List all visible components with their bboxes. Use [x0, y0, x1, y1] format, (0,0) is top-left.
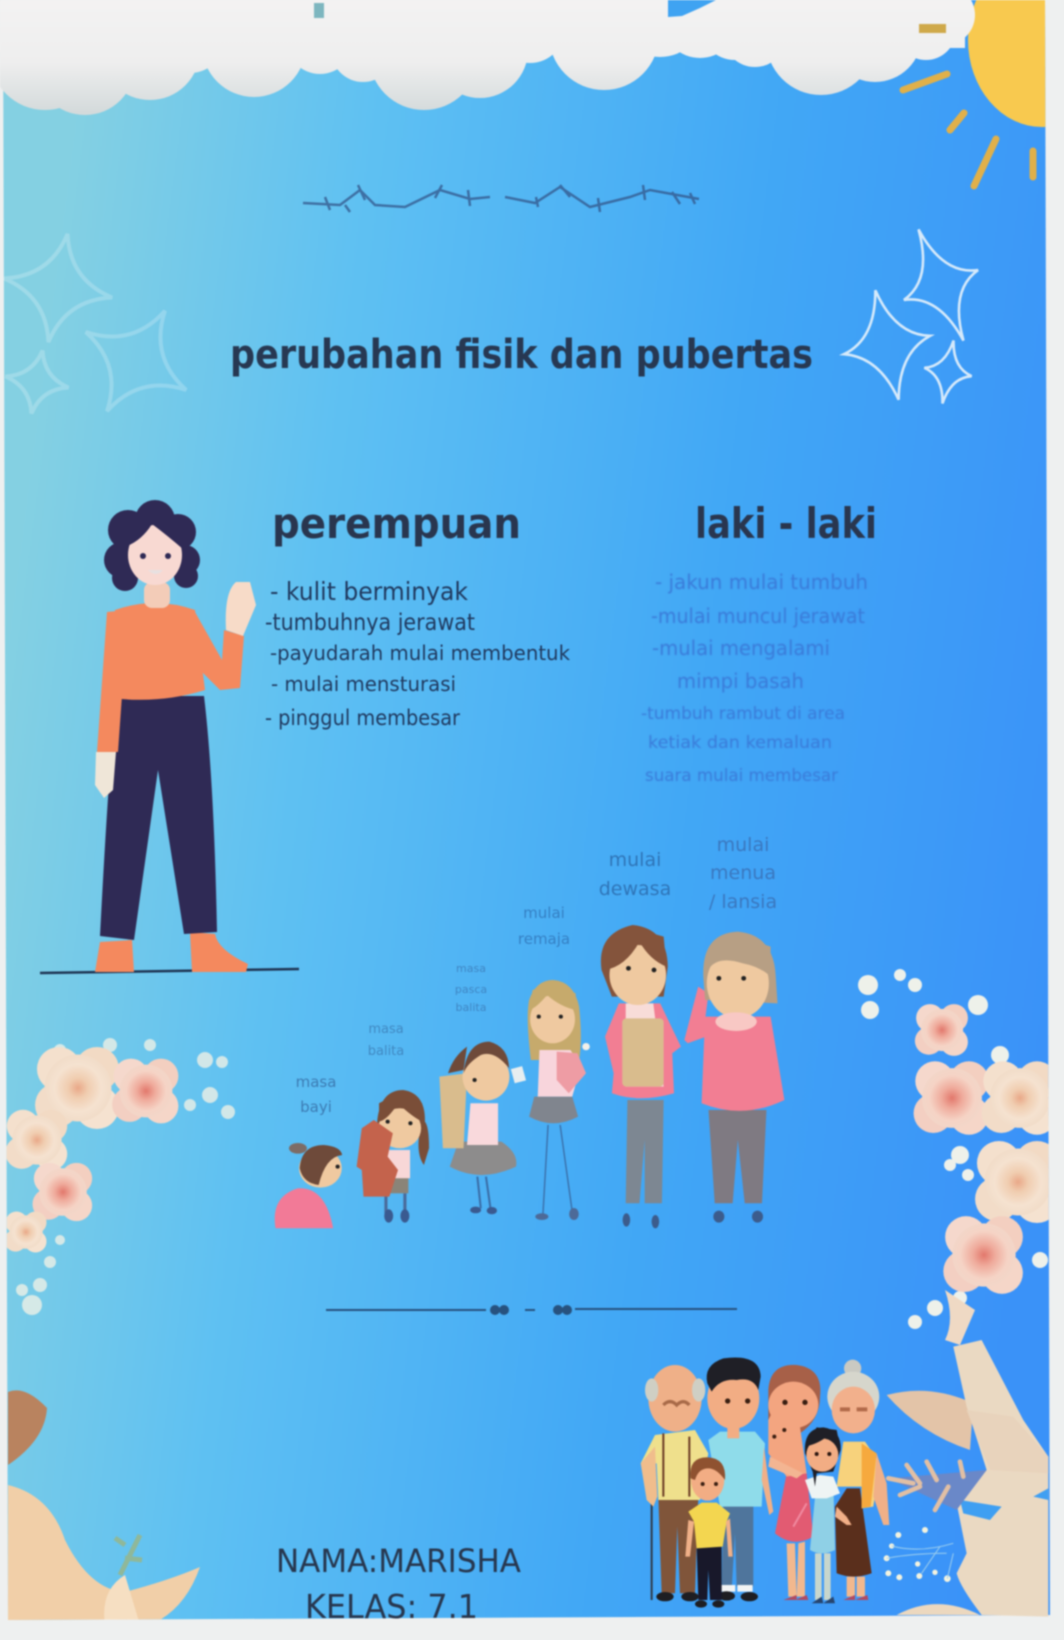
- list: laki-laki changes: mimpi basah: [677, 669, 804, 693]
- label: mulai dewasa: mulai: [609, 849, 661, 871]
- column heading: perempuan: perempuan: [272, 499, 521, 548]
- list: laki-laki changes: -mulai mengalami: [652, 636, 830, 660]
- sun with rays: [903, 0, 1064, 186]
- hair: [104, 500, 200, 591]
- white sprig dots: [884, 1527, 951, 1582]
- beige leaves: [887, 1391, 973, 1450]
- label: masa anak: balita: [456, 1001, 486, 1014]
- list: perempuan changes: -tumbuhnya jerawat: [265, 610, 475, 636]
- baby: [275, 1143, 342, 1228]
- label: mulai remaja: [518, 904, 570, 948]
- father: [707, 1357, 773, 1601]
- label: mulai menua / lansia: [709, 834, 777, 913]
- clouds: [0, 0, 975, 115]
- decorative vine divider: [303, 185, 699, 212]
- student class: KELAS: 7.1: [305, 1587, 478, 1626]
- neck: [144, 582, 170, 608]
- label: mulai remaja: remaja: [518, 930, 570, 948]
- blue fern: [888, 1470, 987, 1510]
- daughter: [793, 1427, 852, 1603]
- list: laki-laki changes: suara mulai membesar: [645, 766, 838, 786]
- label: masa balita: masa: [368, 1022, 404, 1037]
- label: masa anak: pasca: [455, 983, 487, 996]
- shoes: [95, 932, 248, 972]
- grandfather: [641, 1365, 708, 1601]
- illustration: stages of life: [275, 925, 784, 1228]
- column heading: laki-laki: laki - laki: [695, 499, 877, 548]
- floral leaves, bottom right: [884, 1340, 1048, 1617]
- floral cluster, left: [5, 1038, 235, 1315]
- illustration: family group: [641, 1357, 889, 1608]
- label: mulai dewasa: [599, 849, 671, 900]
- label: masa bayi: masa: [296, 1073, 336, 1091]
- list: perempuan changes: -payudarah mulai membentuk: [270, 641, 570, 665]
- list: perempuan changes: - mulai mensturasi: [271, 672, 456, 696]
- bottom divider with ornaments: [326, 1305, 737, 1315]
- label: masa anak: [455, 962, 487, 1014]
- label: mulai dewasa: dewasa: [599, 878, 671, 900]
- label: mulai remaja: mulai: [523, 904, 565, 922]
- list: laki-laki changes: -mulai muncul jerawat: [651, 604, 865, 628]
- faint stars, left: [0, 224, 215, 440]
- teen girl: [528, 980, 590, 1220]
- label: masa balita: balita: [368, 1044, 404, 1059]
- mother with infant: [768, 1365, 820, 1600]
- floral cluster, right: [858, 969, 1059, 1345]
- student name: NAMA:MARISHA: [276, 1542, 521, 1580]
- label: masa bayi: bayi: [300, 1098, 332, 1116]
- face: [128, 525, 182, 585]
- list: perempuan changes: - kulit berminyak: [270, 577, 468, 606]
- trousers: [100, 696, 217, 940]
- left arm with hand: [97, 610, 128, 752]
- ground line: [40, 969, 299, 973]
- label: masa bayi: [296, 1073, 336, 1116]
- illustration: waving woman: [40, 500, 299, 973]
- list: laki-laki changes: - jakun mulai tumbuh: [655, 570, 868, 594]
- list: laki-laki changes: ketiak dan kemaluan: [648, 733, 832, 753]
- list: laki-laki changes: [641, 570, 868, 786]
- label: masa anak: masa: [456, 962, 486, 975]
- label: masa balita: [368, 1022, 404, 1059]
- right arm with hand: [190, 612, 244, 690]
- floral leaves, bottom left: [8, 1390, 200, 1625]
- elderly woman: [684, 932, 784, 1223]
- title: perubahan fisik dan pubertas: [230, 332, 813, 378]
- list: perempuan changes: [265, 577, 570, 730]
- label: mulai menua / lansia: menua: [710, 862, 776, 884]
- list: laki-laki changes: -tumbuh rambut di area: [641, 704, 845, 724]
- toddler: [357, 1090, 429, 1223]
- label: mulai menua / lansia: mulai: [717, 834, 769, 856]
- grandmother: [827, 1360, 889, 1600]
- label: mulai menua / lansia: / lansia: [709, 891, 777, 913]
- boy: [685, 1457, 733, 1608]
- adult woman: [601, 925, 681, 1228]
- list: perempuan changes: - pinggul membesar: [265, 706, 460, 730]
- white outline stars, right: [832, 214, 1001, 409]
- sweater: [112, 603, 205, 700]
- child: [439, 1042, 526, 1214]
- life stage labels: [296, 834, 777, 1116]
